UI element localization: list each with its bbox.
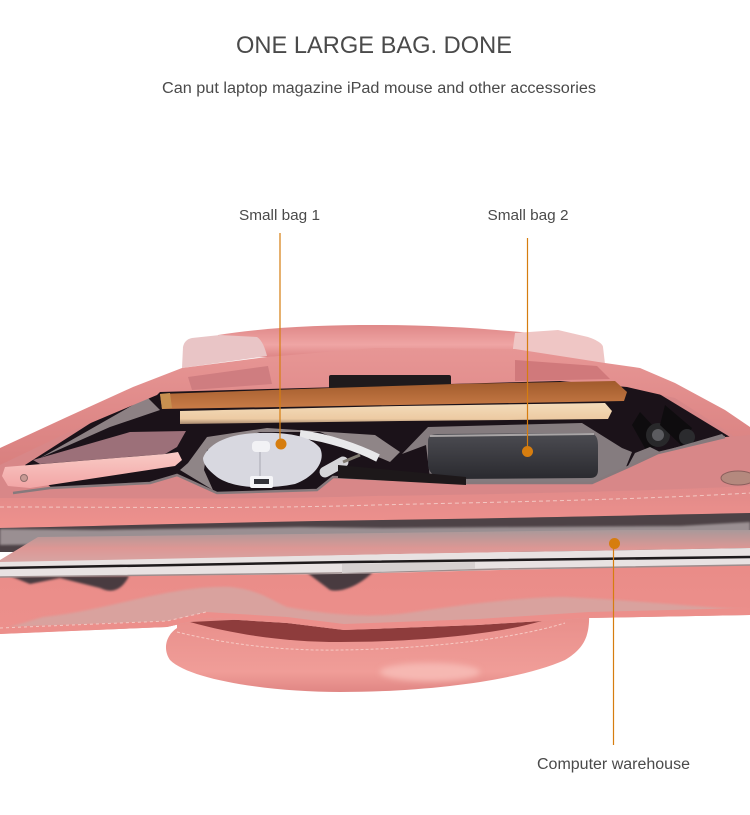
title: ONE LARGE BAG. DONE bbox=[236, 32, 512, 59]
subtitle: Can put laptop magazine iPad mouse and other accessories bbox=[162, 80, 596, 97]
pale suede fold bbox=[0, 587, 750, 630]
grey pouch: small bag 1 bbox=[180, 428, 400, 490]
mouse bbox=[203, 433, 322, 488]
grey pouch: small bag 2 bbox=[402, 423, 632, 484]
bag photo illustration bbox=[0, 325, 750, 692]
grey pocket trim bbox=[13, 437, 725, 493]
lower edge trim bbox=[0, 608, 750, 634]
lower panel base bbox=[0, 565, 750, 635]
book bbox=[160, 381, 627, 409]
callout: small bag 1 bbox=[276, 233, 286, 450]
laptop edge bbox=[0, 548, 750, 577]
grey lining: left bbox=[40, 397, 160, 458]
dark bag interior bbox=[25, 375, 735, 495]
top flap bbox=[0, 348, 750, 465]
label: small bag 2: Small bag 2 bbox=[488, 207, 568, 224]
lower panel bbox=[0, 565, 750, 635]
back handle with leather tabs bbox=[182, 325, 605, 368]
callout: computer warehouse bbox=[609, 538, 620, 745]
white cable bbox=[300, 434, 378, 458]
lower edge stitching bbox=[0, 612, 206, 628]
grey lining: right bbox=[592, 434, 725, 484]
front stitched band bbox=[0, 486, 750, 528]
label: small bag 1: Small bag 1 bbox=[239, 207, 320, 224]
label: computer warehouse: Computer warehouse bbox=[537, 756, 690, 773]
audio jack bbox=[325, 462, 343, 472]
velcro strip lower bbox=[338, 465, 466, 485]
snap button bbox=[721, 471, 750, 485]
black power bank bbox=[428, 433, 598, 479]
front pocket panel bbox=[0, 435, 750, 535]
flap patches bbox=[188, 366, 272, 390]
callout: small bag 2 bbox=[522, 238, 533, 457]
pink backing behind interior bbox=[0, 375, 750, 510]
laptop lid bbox=[0, 530, 750, 563]
velcro strip top bbox=[329, 375, 451, 389]
bottom handle bbox=[166, 612, 589, 692]
tablet bbox=[180, 403, 612, 424]
pens bbox=[632, 405, 695, 450]
phone bbox=[2, 431, 186, 488]
dark folds under laptop bbox=[10, 576, 129, 591]
dark gap with grey lining bbox=[0, 513, 750, 552]
